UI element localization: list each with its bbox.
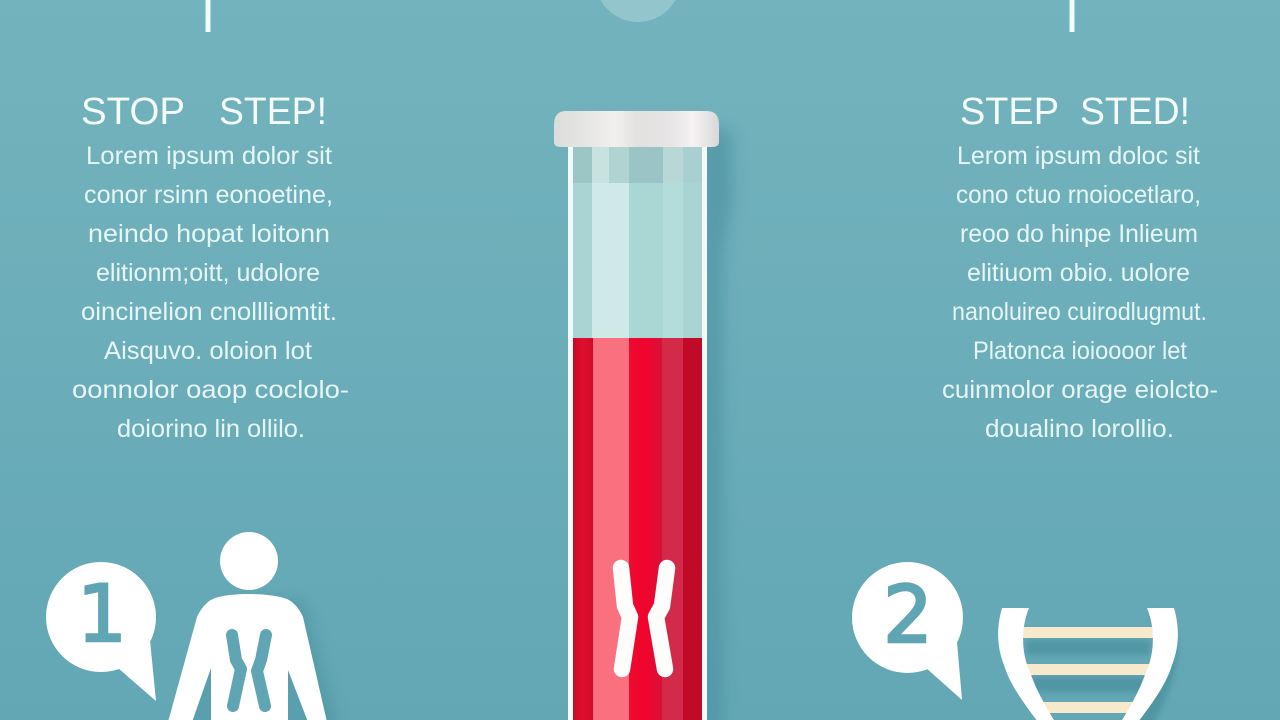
body text: step 1: neindo hopat loitonn [88, 220, 330, 248]
body text: step 2 [942, 142, 1218, 443]
body text: step 2: reoo do hinpe Inlieum [960, 220, 1198, 248]
body text: step 1 [72, 142, 349, 443]
body text: step 1: oincinelion cnollliomtit. [81, 298, 337, 326]
tube cap [554, 111, 719, 147]
heading: step 1: STEP! [219, 91, 327, 133]
heading: step 1: STOP [81, 91, 185, 133]
glass upper band [573, 147, 702, 183]
rungs [1021, 627, 1155, 713]
chromosome cut-out [232, 635, 266, 706]
body text: step 1: Lorem ipsum dolor sit [86, 142, 332, 170]
test tube [554, 111, 732, 720]
heading: step 2: STED! [1080, 91, 1190, 133]
body text: step 2: Lerom ipsum doloc sit [957, 142, 1200, 170]
icon: chromosome in tube [621, 568, 667, 669]
top connector: left tick [206, 0, 210, 32]
body text: step 1: oonnolor oaop coclolo- [72, 376, 349, 404]
right strand [1121, 608, 1178, 720]
callout: number 1 [46, 562, 156, 701]
left strand [998, 608, 1055, 720]
helix shadow [1025, 639, 1178, 720]
body text: step 2: doualino lorollio. [985, 415, 1174, 443]
person shadow [292, 601, 334, 720]
body text: step 1: doiorino lin ollilo. [117, 415, 305, 443]
head [220, 532, 278, 590]
top centre circle [595, 0, 681, 22]
callout: number 2 [852, 562, 963, 700]
body text: step 2: elitiuom obio. uolore [967, 259, 1190, 287]
body text: step 1: conor rsinn eonoetine, [84, 181, 333, 209]
panel: step 2 text [942, 91, 1218, 443]
blood layer [573, 338, 702, 720]
heading: step 2 [960, 91, 1190, 133]
numeral 1: 1 [77, 570, 127, 660]
top connector: right tick [1070, 0, 1074, 32]
body text: step 2: nanoluireo cuirodlugmut. [952, 298, 1207, 326]
arm gaps [192, 668, 308, 720]
body text: step 1: Aisquvo. oloion lot [104, 337, 312, 365]
body text: step 2: cuinmolor orage eiolcto- [942, 376, 1218, 404]
body text: step 2: Platonca ioioooor let [973, 337, 1187, 365]
numeral 2: 2 [883, 571, 933, 661]
bubble [852, 562, 963, 700]
tube walls [568, 147, 707, 720]
panel: step 1 text [72, 91, 349, 443]
body [168, 594, 327, 720]
tube shadow [700, 130, 732, 720]
plasma layer [573, 183, 702, 338]
heading: step 1 [81, 91, 327, 133]
heading: step 2: STEP [960, 91, 1059, 133]
body text: step 2: cono ctuo rnoiocetlaro, [956, 181, 1201, 209]
icon: DNA helix [998, 608, 1178, 720]
body text: step 1: elitionm;oitt, udolore [96, 259, 320, 287]
icon: person with chromosome [168, 532, 340, 720]
bubble [46, 562, 156, 701]
